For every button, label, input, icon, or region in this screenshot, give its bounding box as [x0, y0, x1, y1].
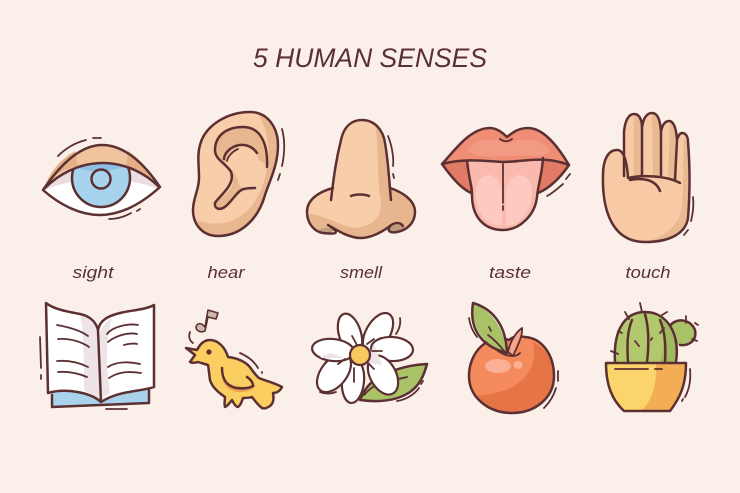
label: smell: smell [340, 263, 383, 282]
label: touch: touch [626, 263, 670, 282]
label: hear: hear [208, 263, 246, 282]
icon: nose (smell) [306, 118, 416, 240]
icon: lips and tongue (taste) [442, 128, 570, 230]
icon: ear (hear) [190, 110, 285, 240]
label: sight: sight [72, 263, 115, 282]
icon: apple [469, 303, 560, 420]
icon: hand (touch) [603, 113, 693, 242]
icon: singing bird [186, 310, 282, 408]
icon: daisy flower [310, 308, 427, 404]
icon: open book [40, 303, 154, 409]
icon: music note [196, 310, 218, 332]
title: 5 HUMAN SENSES [253, 43, 487, 73]
label: taste: taste [489, 263, 531, 282]
icon: eye (sight) [43, 138, 160, 219]
icon: potted cactus [606, 303, 698, 412]
